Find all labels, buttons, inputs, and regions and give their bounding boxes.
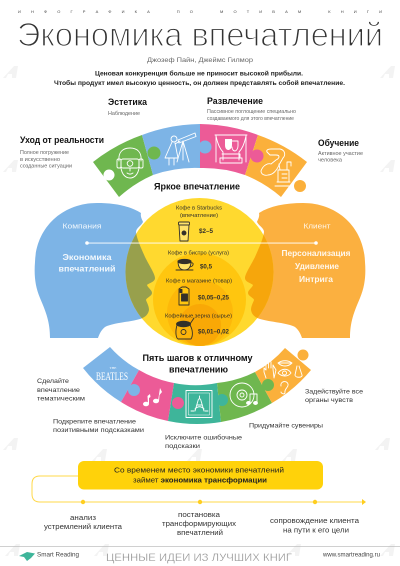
head: client — [245, 203, 365, 338]
authors: Джозеф Пайн, Джеймс Гилмор — [147, 56, 253, 64]
callout: transformation — [78, 461, 323, 490]
title: Экономика впечатлений — [17, 16, 383, 53]
step text: senses: Задействуйте все — [305, 388, 364, 396]
segment: orange — [245, 135, 307, 197]
stage text: analysis — [44, 515, 122, 531]
label: Эстетика: Эстетика — [108, 97, 148, 107]
stage text: setting — [162, 512, 237, 537]
step text: senses — [305, 388, 364, 404]
segment: blue — [142, 124, 200, 175]
step text: cues — [53, 420, 144, 434]
intro text: Чтобы продукт имел высокую ценность, он должен представлять собой впечатление. — [54, 80, 345, 87]
circle: commodity — [179, 304, 221, 346]
timeline arrow — [32, 476, 366, 505]
icon: VR headset — [117, 148, 143, 178]
stage text: setting: трансформирующих — [162, 521, 237, 528]
label: Развлечение — [207, 96, 296, 122]
icon: logo book — [19, 552, 35, 561]
stage text: support: на пути к его цели — [283, 528, 349, 534]
step text: senses: органы чувств — [305, 398, 353, 404]
step text: cues: позитивными подсказками — [53, 428, 144, 434]
label: Обучение: Активное участие — [318, 151, 363, 157]
icon: coffee cup — [176, 259, 193, 270]
stage text: setting: впечатлений — [177, 529, 223, 537]
circle: service — [153, 253, 246, 346]
knob: blue — [198, 140, 212, 154]
head text: client — [282, 224, 351, 284]
segment: blue — [83, 347, 139, 402]
brand name: Smart Reading — [37, 552, 79, 558]
label: Уход от реальности: Полное погружение — [20, 150, 69, 156]
knob: orange — [298, 350, 308, 360]
segment: pink — [121, 370, 174, 421]
head text: client: Клиент — [304, 224, 331, 230]
icon: theatre stage — [215, 135, 247, 163]
segment: teal — [168, 383, 221, 424]
head text: client: Интрига — [299, 275, 334, 284]
knob: green — [262, 379, 274, 391]
level: Starbucks: (впечатление) — [180, 213, 218, 219]
icon: chess and hand — [261, 149, 292, 186]
callout: transformation: Со временем место экономики впечатлений — [114, 466, 284, 474]
label: Развлечение: Развлечение — [207, 96, 263, 106]
footer — [0, 546, 400, 564]
stage text: analysis: устремлений клиента — [44, 523, 122, 531]
intro text — [54, 70, 345, 87]
heading: five steps — [142, 353, 252, 374]
label: Эстетика: Наблюдение — [108, 111, 140, 117]
level: beans: Кофейные зерна (сырье) — [165, 312, 232, 320]
step text: theme: впечатление — [37, 388, 81, 394]
knob: teal — [216, 394, 228, 406]
heading: five steps: Пять шагов к отличному — [142, 353, 252, 363]
level: beans: $0,01–0,02 — [198, 328, 229, 336]
step text: errors — [165, 436, 243, 450]
knob: pink — [250, 150, 264, 162]
label: Эстетика — [108, 97, 148, 117]
callout: transformation: займет экономика трансформации — [133, 476, 267, 484]
label: Уход от реальности: созданные ситуации — [20, 164, 72, 170]
level: Starbucks: $2–5 — [199, 228, 213, 235]
icon: coffee bag — [176, 318, 194, 339]
step text: cues: Подкрепите впечатление — [53, 420, 137, 426]
level: bistro: Кофе в бистро (услуга) — [168, 250, 229, 256]
label: Обучение: Обучение — [318, 138, 359, 148]
overlap: left head — [126, 234, 155, 318]
label: Развлечение: создаваемого для этого впечатление — [207, 116, 294, 122]
intro text: Ценовая конкуренция больше не приносит высокой прибыли. — [95, 70, 303, 78]
segment: green — [217, 372, 272, 422]
head text: company: Компания — [62, 224, 102, 230]
label: Развлечение: Пассивное поглощение специально — [207, 109, 296, 115]
icon: Beatles logo — [96, 366, 128, 383]
level: shop — [166, 278, 232, 305]
level: shop: $0,05–0,25 — [198, 294, 229, 302]
level: beans — [165, 312, 232, 339]
icon: five senses — [264, 361, 302, 394]
step text: errors: Исключите ошибочные — [165, 436, 243, 442]
step text: theme: Сделайте — [37, 378, 70, 385]
segment: pink — [200, 124, 258, 175]
stage text: analysis: анализ — [70, 515, 96, 522]
head text: company — [58, 224, 116, 274]
circle: product — [167, 280, 233, 346]
website: www.smartreading.ru — [322, 552, 380, 558]
head text: company: Экономика — [62, 253, 112, 262]
stage text: support: сопровождение клиента — [270, 518, 359, 525]
level: bistro — [168, 250, 229, 270]
circle: experience — [126, 198, 274, 346]
icon: disc and note — [230, 383, 258, 407]
label: Обучение: человека — [318, 158, 342, 164]
overlap: right head — [245, 235, 274, 318]
top puzzle arch — [93, 124, 307, 197]
icon: coffee pack — [179, 287, 189, 305]
knob: blue — [128, 384, 140, 396]
icon: takeaway cup — [178, 222, 190, 241]
tagline: ЦЕННЫЕ ИДЕИ ИЗ ЛУЧШИХ КНИГ — [106, 552, 292, 564]
level: Starbucks: Кофе в Starbucks — [176, 206, 222, 212]
level: shop: Кофе в магазине (товар) — [166, 278, 232, 284]
knob: orange — [294, 180, 306, 192]
head text: client: Персонализация — [282, 249, 351, 258]
heading: five steps: впечатлению — [169, 364, 228, 374]
head: company — [35, 203, 155, 338]
stage text: setting: постановка — [178, 512, 220, 519]
head text: client: Удивление — [295, 262, 340, 271]
connecting line — [85, 241, 318, 245]
step text: errors: подсказки — [165, 444, 200, 450]
supertitle: И Н Ф О Г Р А Ф И К А П О М О Т И В А М К Н И Г И — [18, 9, 382, 14]
level: bistro: $0,5 — [200, 264, 212, 270]
bottom puzzle arch — [83, 347, 311, 424]
step text: theme — [37, 378, 85, 402]
icon: telescope and girl — [165, 133, 196, 165]
icon: Beatles logo: BEATLES — [96, 369, 128, 383]
label: Обучение — [318, 138, 363, 164]
label: Уход от реальности: Уход от реальности — [20, 135, 104, 145]
heading: Яркое впечатление: Яркое впечатление — [154, 182, 240, 192]
icon: music notes — [143, 388, 162, 406]
knob: pink — [172, 397, 184, 409]
head text: company: впечатлений — [58, 264, 116, 274]
segment: orange — [255, 348, 311, 403]
knob: white notch — [104, 170, 114, 180]
label: Уход от реальности: в искусственно — [20, 157, 60, 163]
icon: framed Eiffel tower — [186, 390, 212, 418]
segment: green — [93, 135, 153, 197]
icon: Beatles logo: THE — [110, 366, 116, 370]
step text: souvenirs: Придумайте сувениры — [249, 422, 323, 430]
stage text: support — [270, 518, 359, 534]
level: Starbucks — [176, 206, 222, 241]
label: Уход от реальности — [20, 135, 104, 170]
knob: green — [148, 146, 160, 160]
step text: theme: тематическим — [37, 396, 85, 402]
